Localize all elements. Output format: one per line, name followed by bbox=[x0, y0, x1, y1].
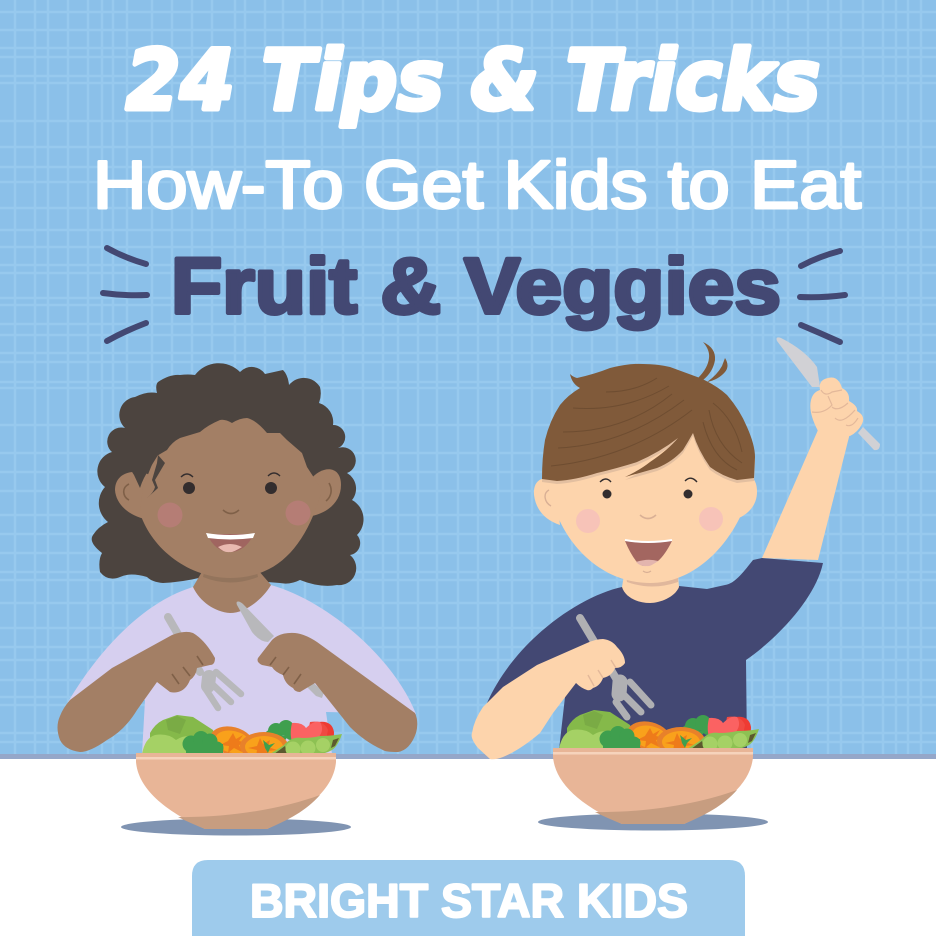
boy mouth bbox=[625, 540, 672, 572]
character: boy bbox=[472, 337, 880, 759]
tomato slices bbox=[291, 722, 334, 746]
bowl body bbox=[136, 753, 336, 829]
salad bowl: boy bbox=[538, 710, 768, 830]
girl front hair tip bbox=[131, 445, 158, 488]
carrot slices bbox=[207, 722, 288, 760]
girl eyebrows bbox=[181, 473, 280, 477]
title: 24 Tips & Tricks: 24 Tips & Tricks bbox=[126, 32, 820, 129]
brand name: BRIGHT STAR KIDS bbox=[250, 874, 688, 927]
boy hair bbox=[542, 364, 755, 481]
bowl rim bbox=[136, 757, 336, 760]
bowl shade bbox=[178, 795, 320, 829]
boy hair shadow bbox=[542, 383, 755, 484]
lettuce bbox=[142, 715, 220, 754]
subtitle: How-To Get Kids to Eat: How-To Get Kids to Eat bbox=[93, 147, 861, 223]
heading: Fruit & Veggies: Fruit & Veggies bbox=[171, 241, 781, 330]
boy nose bbox=[640, 515, 656, 518]
girl eyes bbox=[183, 482, 277, 494]
emphasis rays: right bbox=[800, 251, 845, 342]
girl ears bbox=[115, 469, 341, 520]
boy eyes bbox=[602, 490, 692, 498]
broccoli front bbox=[182, 731, 224, 754]
emphasis rays: left bbox=[103, 248, 147, 341]
girl left arm bbox=[58, 632, 215, 752]
bowl shadow bbox=[121, 818, 351, 836]
boy lower arm bbox=[472, 639, 625, 759]
girl cheeks bbox=[158, 500, 310, 528]
girl hair back bbox=[92, 363, 364, 586]
boy cowlick bbox=[698, 342, 728, 382]
pea pod bbox=[263, 734, 342, 756]
boy cheeks bbox=[576, 507, 723, 533]
girl mouth bbox=[206, 533, 255, 552]
boy shirt bbox=[487, 558, 823, 750]
boy knife bbox=[776, 337, 880, 450]
girl neck bbox=[193, 570, 271, 613]
brand badge: Bright Star Kids bbox=[192, 860, 745, 936]
girl right arm bbox=[258, 633, 417, 752]
salad bowl: girl bbox=[121, 715, 351, 836]
girl knife bbox=[237, 602, 324, 698]
boy hair strands bbox=[551, 378, 742, 470]
girl fork bbox=[168, 617, 241, 708]
boy neck bbox=[622, 575, 679, 603]
boy ears bbox=[534, 476, 757, 525]
boy fork bbox=[580, 618, 651, 717]
boy raised arm bbox=[762, 430, 850, 560]
boy hand bbox=[810, 377, 863, 436]
boy face bbox=[548, 420, 754, 583]
character: girl bbox=[58, 363, 417, 754]
broccoli back bbox=[265, 720, 297, 745]
boy eyebrows bbox=[600, 478, 697, 482]
girl nose bbox=[223, 510, 239, 514]
girl curl bbox=[147, 455, 165, 498]
girl face bbox=[140, 418, 322, 578]
girl shirt bbox=[68, 585, 416, 754]
